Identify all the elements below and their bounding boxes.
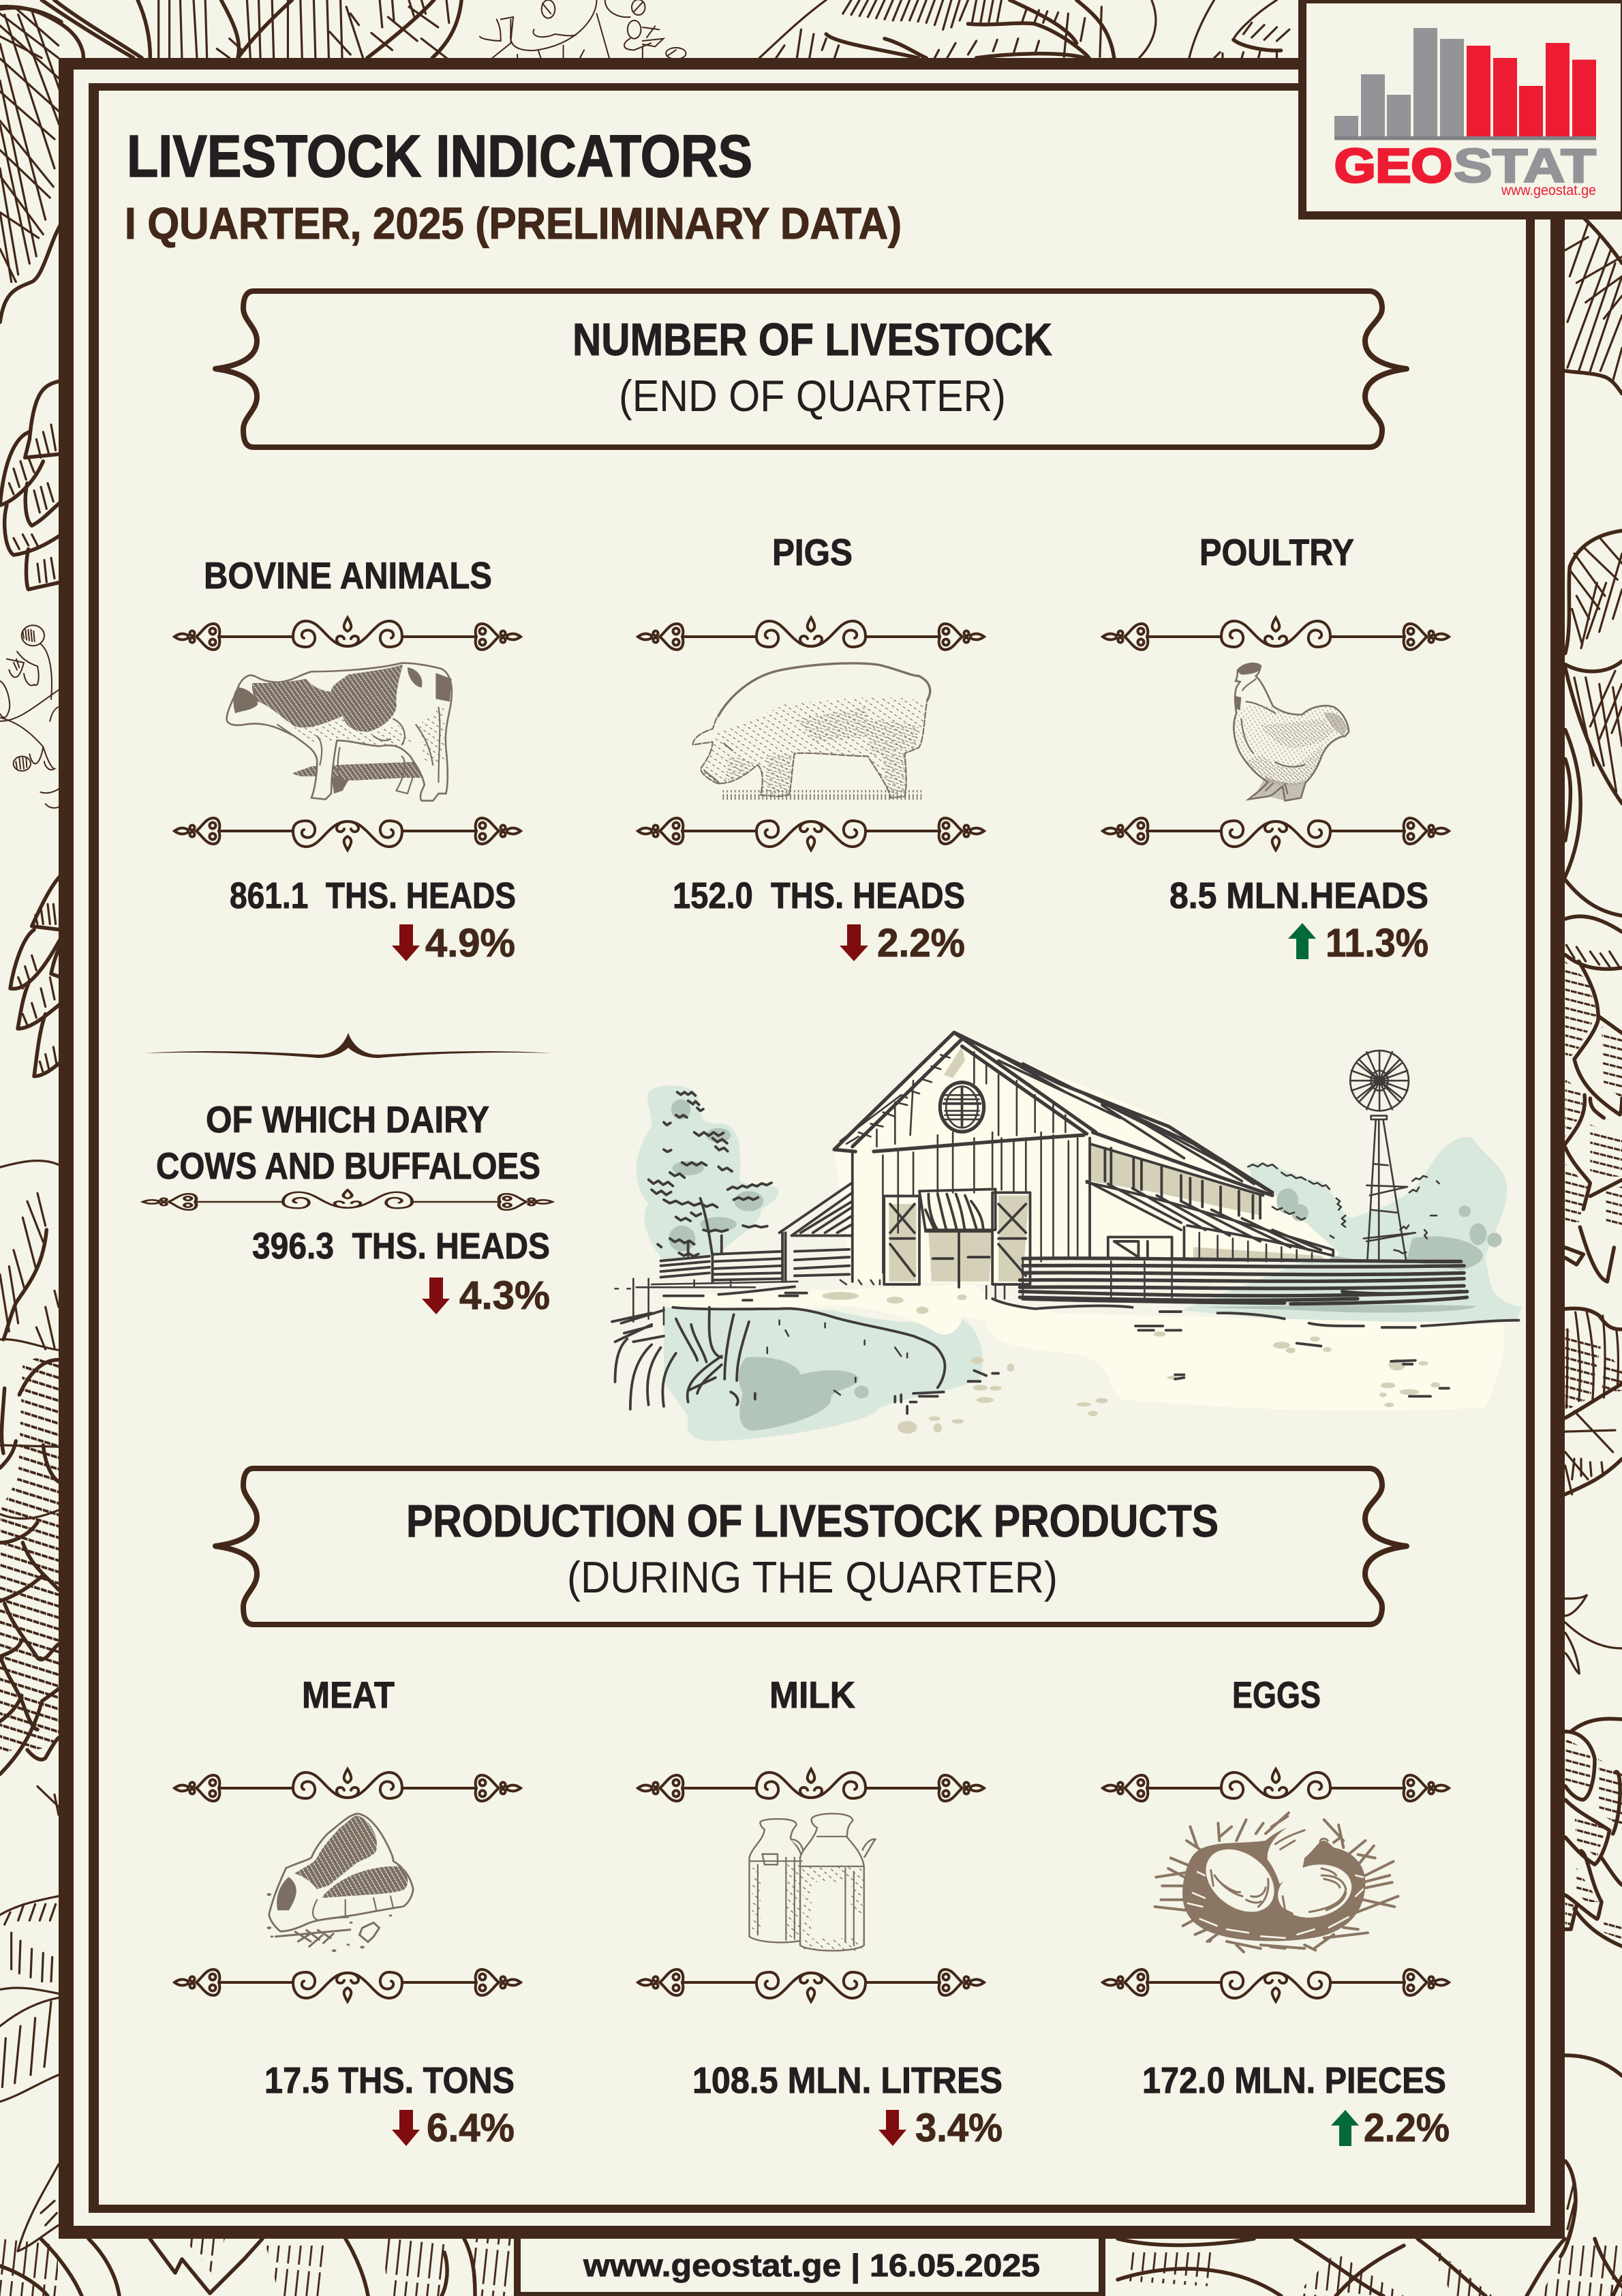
change: 11.3% <box>1326 921 1428 965</box>
value: 108.5 MLN. LITRES <box>692 2060 1003 2101</box>
heading: OF WHICH DAIRY <box>206 1098 489 1141</box>
logo wordmark: STAT <box>1454 139 1596 192</box>
ornament lower <box>174 1969 521 2002</box>
logo wordmark: GEO <box>1334 139 1452 192</box>
logo panel <box>1298 0 1622 220</box>
value: 8.5 MLN.HEADS <box>1169 875 1428 916</box>
footer text: www.geostat.ge | 16.05.2025 <box>583 2248 1040 2283</box>
background: bottom botanical border <box>0 2239 1622 2296</box>
change: 2.2% <box>877 921 965 965</box>
arrow down <box>392 924 420 961</box>
heading: EGGS <box>1232 1674 1321 1716</box>
heading: MILK <box>769 1674 855 1716</box>
heading: MEAT <box>302 1674 395 1716</box>
panel: meat <box>174 1674 521 2150</box>
icon: meat <box>266 1813 413 1952</box>
logo bar chart <box>1334 28 1596 140</box>
panel: bovine animals <box>174 554 521 965</box>
ornament <box>174 1769 521 1801</box>
heading: POULTRY <box>1199 531 1354 573</box>
change: 4.3% <box>459 1273 550 1318</box>
change: 4.9% <box>425 921 515 965</box>
panel: eggs <box>1103 1674 1450 2150</box>
ornament lower <box>1103 1969 1449 2002</box>
banner heading: PRODUCTION OF LIVESTOCK PRODUCTS <box>406 1496 1219 1547</box>
change: 6.4% <box>427 2106 515 2150</box>
arrow down <box>422 1278 450 1314</box>
value: 172.0 MLN. PIECES <box>1142 2060 1446 2101</box>
icon: milk cans <box>749 1813 875 1950</box>
value: 152.0 THS. HEADS <box>673 875 965 916</box>
background: right botanical border upper <box>1565 217 1622 1228</box>
panel: dairy cows and buffaloes <box>143 1033 552 1318</box>
background: top botanical border <box>0 0 1289 59</box>
logo wordmark <box>1334 139 1596 198</box>
value: 396.3 THS. HEADS <box>252 1226 550 1267</box>
ornament lower <box>638 818 984 850</box>
ornament <box>638 1769 984 1801</box>
arrow down <box>878 2110 906 2146</box>
ornament <box>638 618 984 650</box>
ornament lower <box>638 1969 984 2002</box>
footer box <box>514 2233 1105 2296</box>
subtitle: I QUARTER, 2025 (PRELIMINARY DATA) <box>125 198 902 248</box>
banner subheading: (DURING THE QUARTER) <box>567 1552 1058 1602</box>
background: left botanical border upper <box>0 7 61 1076</box>
title: LIVESTOCK INDICATORS <box>127 123 752 190</box>
icon: nest with eggs <box>1155 1813 1398 1952</box>
barn illustration <box>612 1033 1522 1441</box>
change: 3.4% <box>915 2106 1003 2150</box>
icon: cow <box>227 663 452 801</box>
heading: PIGS <box>772 531 853 573</box>
swash ornament <box>144 1033 551 1058</box>
section banner: number of livestock <box>215 291 1407 447</box>
panel: milk <box>638 1674 1003 2150</box>
arrow down <box>840 924 868 961</box>
background: left botanical border lower <box>0 1161 59 2251</box>
logo wordmark: www.geostat.ge <box>1501 183 1596 198</box>
background: right botanical border lower <box>1561 1227 1622 2296</box>
ornament <box>1103 618 1449 650</box>
arrow up <box>1288 923 1316 959</box>
section banner: production <box>215 1468 1407 1625</box>
panel: poultry <box>1103 531 1449 965</box>
value: 17.5 THS. TONS <box>264 2060 515 2101</box>
change: 2.2% <box>1364 2106 1450 2150</box>
banner subheading: (END OF QUARTER) <box>619 371 1006 421</box>
heading line 2: COWS AND BUFFALOES <box>156 1145 540 1187</box>
panel: pigs <box>638 531 984 965</box>
divider ornament <box>143 1190 552 1210</box>
icon: chicken <box>1234 663 1349 801</box>
icon: pig <box>693 663 930 800</box>
banner heading: NUMBER OF LIVESTOCK <box>572 314 1052 365</box>
ornament <box>174 618 521 650</box>
ornament lower <box>1103 818 1449 850</box>
ornament lower <box>174 818 521 850</box>
arrow down <box>392 2110 420 2146</box>
ornament <box>1103 1769 1449 1801</box>
heading: BOVINE ANIMALS <box>204 554 492 596</box>
value: 861.1 THS. HEADS <box>230 875 516 916</box>
arrow up <box>1331 2110 1359 2146</box>
